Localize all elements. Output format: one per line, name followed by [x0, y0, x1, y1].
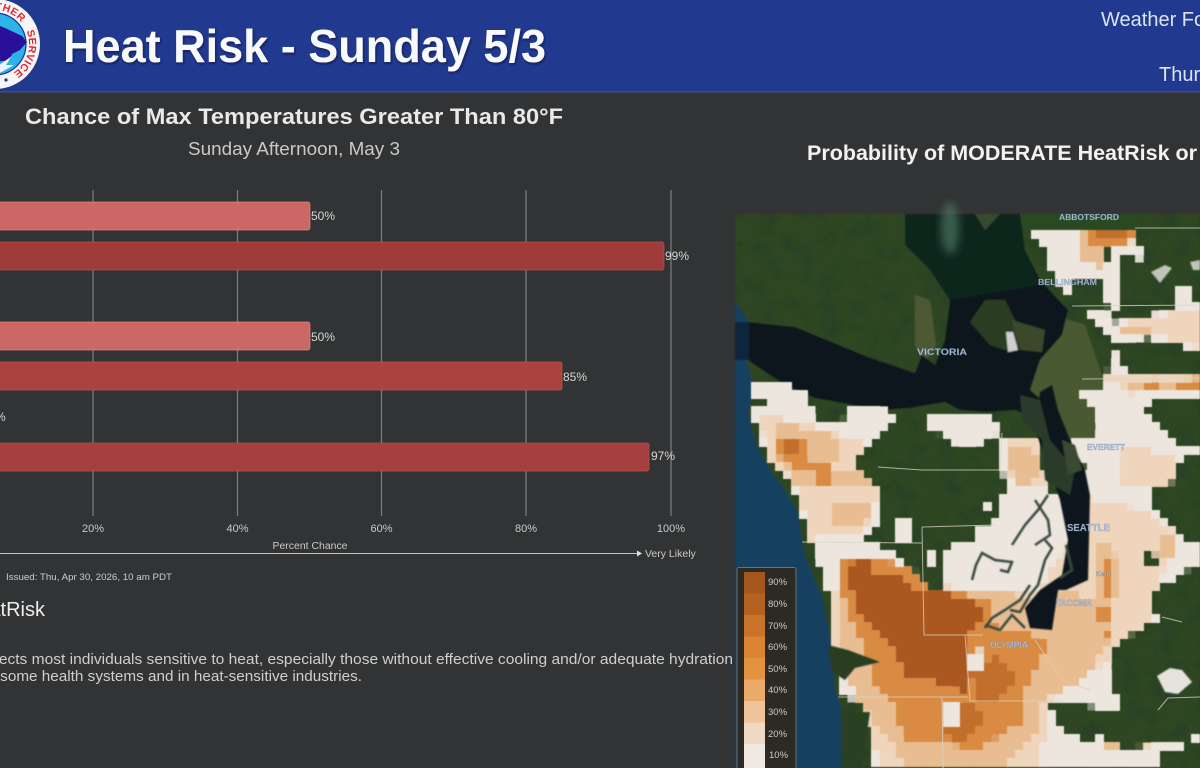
x axis ticks [82, 523, 685, 535]
county boundaries [802, 228, 1200, 768]
city labels: BELLINGHAM [1038, 277, 1097, 287]
title: Heat Risk - Sunday 5/3 [63, 20, 546, 72]
snow-capped peaks [1151, 260, 1200, 694]
x axis ticks: 80% [515, 523, 537, 535]
city labels [917, 212, 1126, 650]
x axis ticks: 20% [82, 523, 104, 535]
icon: National Weather Service logo: SERVICE [14, 30, 36, 78]
bar value labels: 99% [665, 249, 689, 263]
bar value labels: 97% [651, 449, 675, 463]
legend [737, 568, 796, 768]
text block: heat risk description [0, 651, 733, 685]
grid lines [93, 190, 671, 516]
legend swatches [744, 572, 765, 768]
legend labels: 20% [768, 729, 788, 740]
legend labels: 10% [769, 750, 789, 761]
panel: probability map [735, 202, 1200, 768]
legend labels: 90% [768, 577, 788, 588]
bar value labels [0, 209, 689, 463]
city labels: Kent [1096, 571, 1112, 578]
cream base [752, 228, 1200, 768]
satellite base map [735, 202, 1200, 768]
strong orange [845, 560, 985, 693]
x axis ticks: 100% [657, 523, 685, 535]
city labels: VICTORIA [917, 347, 967, 358]
header banner [0, 0, 1200, 92]
panel: chance of max temperatures chart [0, 104, 697, 583]
axis title: Percent Chance [272, 541, 348, 552]
map title: Probability of MODERATE HeatRisk or [807, 142, 1197, 165]
city labels: EVERETT [1087, 442, 1126, 452]
x axis ticks: 60% [370, 523, 393, 535]
city labels: ABBOTSFORD [1059, 212, 1119, 222]
legend labels: 80% [768, 599, 788, 610]
axis end label: Very Likely [645, 548, 697, 560]
chart subtitle: Sunday Afternoon, May 3 [188, 139, 400, 159]
bar value labels: 50% [311, 209, 335, 223]
issued note: Issued: Thu, Apr 30, 2026, 10 am PDT [6, 572, 172, 583]
legend labels: 40% [768, 685, 788, 696]
city labels: OLYMPIA [990, 640, 1028, 650]
icon: National Weather Service logo [0, 0, 40, 89]
legend labels: 50% [768, 664, 788, 675]
city labels: SEATTLE [1067, 523, 1110, 534]
bars [0, 202, 664, 471]
bar value labels: 50% [311, 330, 335, 344]
light orange [772, 228, 1200, 768]
pale peach [758, 310, 1200, 768]
cream patches [942, 650, 985, 723]
x axis ticks: 40% [226, 523, 249, 535]
Puget Sound water and shoreline [828, 385, 1090, 768]
medium orange [775, 228, 1200, 753]
arrow: likelihood axis [0, 550, 642, 556]
city labels: TACOMA [1056, 598, 1092, 608]
legend labels: 30% [768, 707, 788, 718]
legend labels: 60% [768, 642, 788, 653]
probability shading [752, 228, 1200, 768]
chart title: Chance of Max Temperatures Greater Than 80°F [25, 104, 563, 129]
legend labels [768, 577, 789, 761]
legend labels: 70% [768, 621, 788, 632]
bar value labels: 85% [563, 370, 587, 384]
